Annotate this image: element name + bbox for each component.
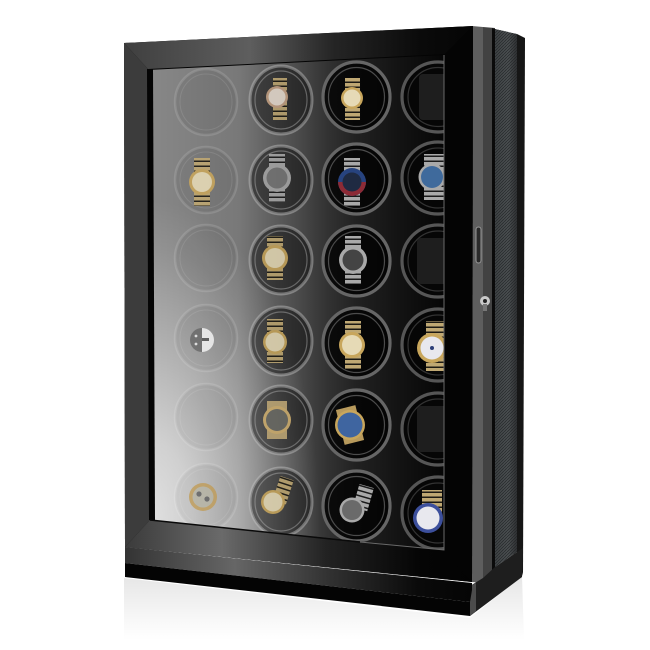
watch r5c3 [335, 405, 365, 445]
winder r3c4 [402, 225, 474, 297]
winder r3c1 [175, 225, 237, 291]
watch r4c4 [417, 321, 447, 371]
icon: control button slot [476, 227, 481, 263]
glass reflection, bottom-left glow [154, 234, 308, 536]
winder r6c1 [175, 464, 237, 530]
base: upper band [125, 547, 472, 602]
glass edge highlight [360, 55, 444, 550]
watch r2c3 [338, 158, 366, 206]
winder r2c1 [175, 147, 237, 213]
watch r1c2 [266, 78, 288, 120]
base plinth [125, 547, 472, 616]
icon: lock [480, 296, 490, 311]
glass reflection, horizontal falloff [153, 57, 415, 546]
floor reflection [124, 576, 524, 640]
winder r5c3 [323, 390, 390, 460]
frame: right bar [443, 26, 473, 582]
winder r5c4 [402, 393, 474, 465]
side: base block [470, 548, 523, 616]
winder r4c4 [402, 309, 474, 381]
cabinet right side [470, 26, 525, 616]
winder r6c2 [250, 468, 312, 536]
winder r3c3 [323, 226, 390, 296]
winder r1c4 [402, 62, 474, 132]
watch r4c2 [263, 319, 287, 363]
winder r4c3 [323, 308, 390, 378]
winder r4c2 [250, 307, 312, 375]
watch r6c3 [340, 484, 374, 522]
side: carbon fibre panel [495, 29, 517, 567]
watch r6c4 [413, 490, 443, 533]
frame: outer panel [124, 26, 473, 582]
watch r3c3 [339, 236, 367, 284]
watch r2c2 [263, 154, 291, 202]
frame: left bar [124, 43, 150, 547]
winder r2c4 [402, 142, 474, 214]
winder r1c2 [250, 66, 312, 134]
frame: bottom bar [125, 520, 472, 582]
winder column 1 [175, 69, 237, 530]
winder r5c2 [250, 386, 312, 454]
watch r1c3 [341, 78, 363, 120]
watch r5c2 [263, 401, 291, 439]
winder r1c3 [323, 62, 390, 132]
watch r3c2 [262, 236, 288, 280]
winder column 4 [402, 62, 474, 549]
winder r6c3 [323, 471, 390, 541]
watch r4c3 [339, 321, 365, 369]
side: silver door edge strips [472, 26, 483, 583]
winder column 3 [323, 62, 390, 541]
glass inner shadow strip at left [147, 69, 155, 520]
watch r4c1 half visible [190, 328, 214, 352]
winder r6c4 [402, 477, 474, 549]
watch r2c1 [189, 158, 215, 206]
base: gloss lower band [125, 563, 470, 616]
watch r2c4 [418, 154, 446, 200]
winder r1c1 [175, 69, 237, 135]
winder r4c1 [175, 305, 237, 371]
watch r6c2 [261, 476, 294, 514]
door frame [124, 26, 473, 582]
glass window with winders [153, 56, 444, 550]
side: rear edge [517, 34, 525, 576]
winder r3c2 [250, 226, 312, 294]
winder r2c3 [323, 144, 390, 214]
winder r5c1 [175, 384, 237, 450]
winder r2c2 [250, 146, 312, 214]
glass lower edge dark line [150, 520, 360, 542]
glass backing [140, 50, 450, 555]
winder column 2 [250, 66, 312, 536]
frame: top bar [124, 26, 473, 69]
watch r6c1 [189, 483, 217, 511]
